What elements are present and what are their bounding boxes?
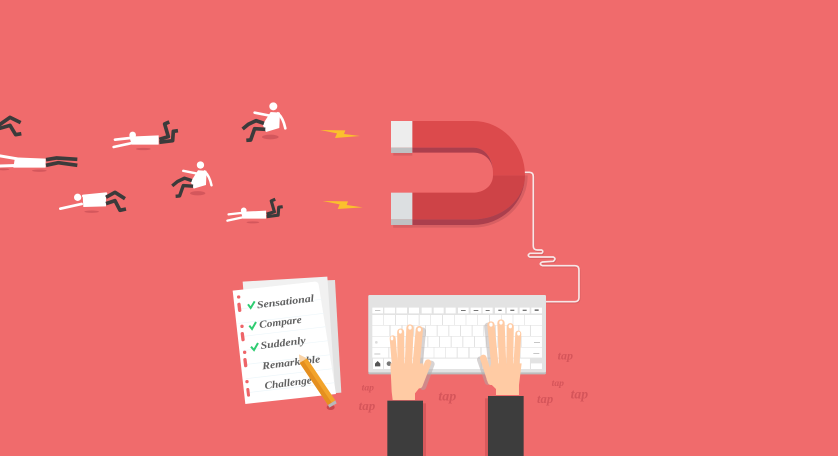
tap 4: tap [558,349,573,363]
right sleeve [485,396,524,456]
word: Suddenly: Suddenly [260,335,307,352]
people being pulled toward the magnet [0,102,285,223]
tap words [359,349,588,413]
word: Challenge: Challenge [264,375,313,392]
tap 1: tap [362,382,374,393]
icon: lightning bolt lower [323,201,363,209]
person: seated, lower [172,161,211,196]
checkmark 2 [249,322,256,329]
tap 7: tap [537,392,553,406]
tap 3: tap [438,389,456,404]
tap 6: tap [571,386,588,401]
word: Sensational: Sensational [256,293,315,311]
person: lying, upper middle [114,122,178,150]
magnet, bolts and cable [320,121,580,303]
keys [372,308,542,369]
left hand [390,326,431,400]
word: Compare: Compare [259,315,303,331]
magnet lower pole cap [391,193,412,225]
back sheet [243,277,335,398]
magnet upper pole cap [391,121,412,153]
word: Remarkable: Remarkable [261,354,321,372]
keyboard [368,295,546,374]
right hand [480,321,522,395]
icon: globe key [387,361,391,366]
checkmark 3 [251,343,258,350]
left sleeve [387,401,426,456]
notepad checklist [233,277,341,410]
punched holes [237,295,250,397]
front sheet [233,282,336,404]
person: seated, upper [243,102,285,140]
back sheet right [255,280,341,398]
pencil [299,354,337,410]
person: top-left edge, legs only [0,117,21,135]
cable [525,172,580,303]
magnet [391,121,528,228]
person: lying, lower right [227,199,283,223]
tap 5: tap [552,378,564,389]
person: lying, lower left [60,192,126,213]
checkmark 1 [248,301,255,308]
person: lying, far left [0,156,77,172]
icon: home key [375,361,380,366]
small key marks [374,309,540,354]
ruled lines [237,299,335,393]
tap 2: tap [359,398,376,413]
keyboard and hands [359,295,588,456]
icon: lightning bolt upper [320,130,360,138]
